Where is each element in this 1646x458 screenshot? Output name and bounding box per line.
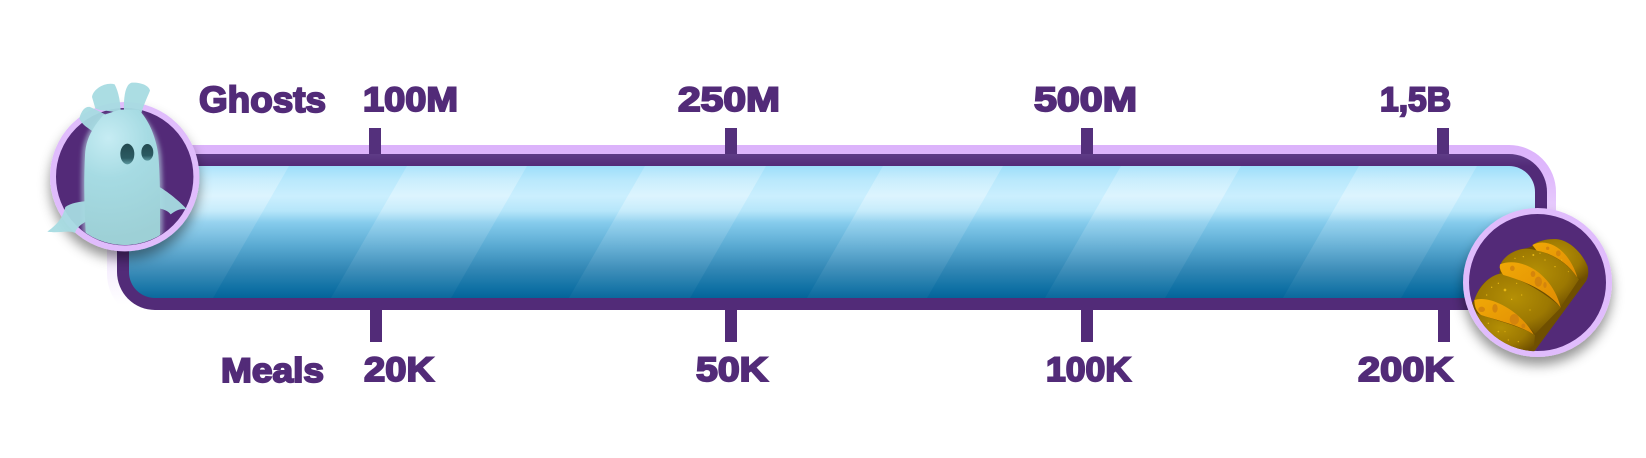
- diagonal light stripes: [94, 166, 1477, 298]
- label: 1,5B: 1,5B: [1380, 81, 1451, 119]
- progress scale infographic: [42, 82, 1620, 384]
- ghost eyes: [120, 144, 153, 164]
- heading: Ghosts: Ghosts: [199, 79, 326, 120]
- loaf lumps: [1473, 239, 1588, 353]
- top tick marks: [369, 128, 1449, 156]
- bread loaf: [1465, 239, 1588, 353]
- bar water fill: [94, 166, 1535, 298]
- label: 20K: 20K: [364, 351, 434, 389]
- label: 500M: 500M: [1034, 81, 1137, 119]
- heading: Meals: Meals: [221, 352, 324, 390]
- label: 100K: 100K: [1046, 351, 1131, 389]
- label: 200K: 200K: [1358, 351, 1454, 389]
- icon: bread badge: [1465, 211, 1609, 354]
- icon: ghost badge: [47, 83, 196, 248]
- bar outer lavender border: [107, 145, 1556, 321]
- bar dark frame: [117, 154, 1547, 310]
- label: 100M: 100M: [363, 81, 458, 119]
- bread slashes: [1474, 243, 1577, 334]
- label: 50K: 50K: [696, 351, 769, 389]
- ghost figure: [47, 83, 187, 248]
- bottom tick marks: [370, 308, 1450, 342]
- crust speckles: [1486, 253, 1569, 342]
- label: 250M: 250M: [678, 81, 780, 119]
- slash spots: [1478, 247, 1561, 328]
